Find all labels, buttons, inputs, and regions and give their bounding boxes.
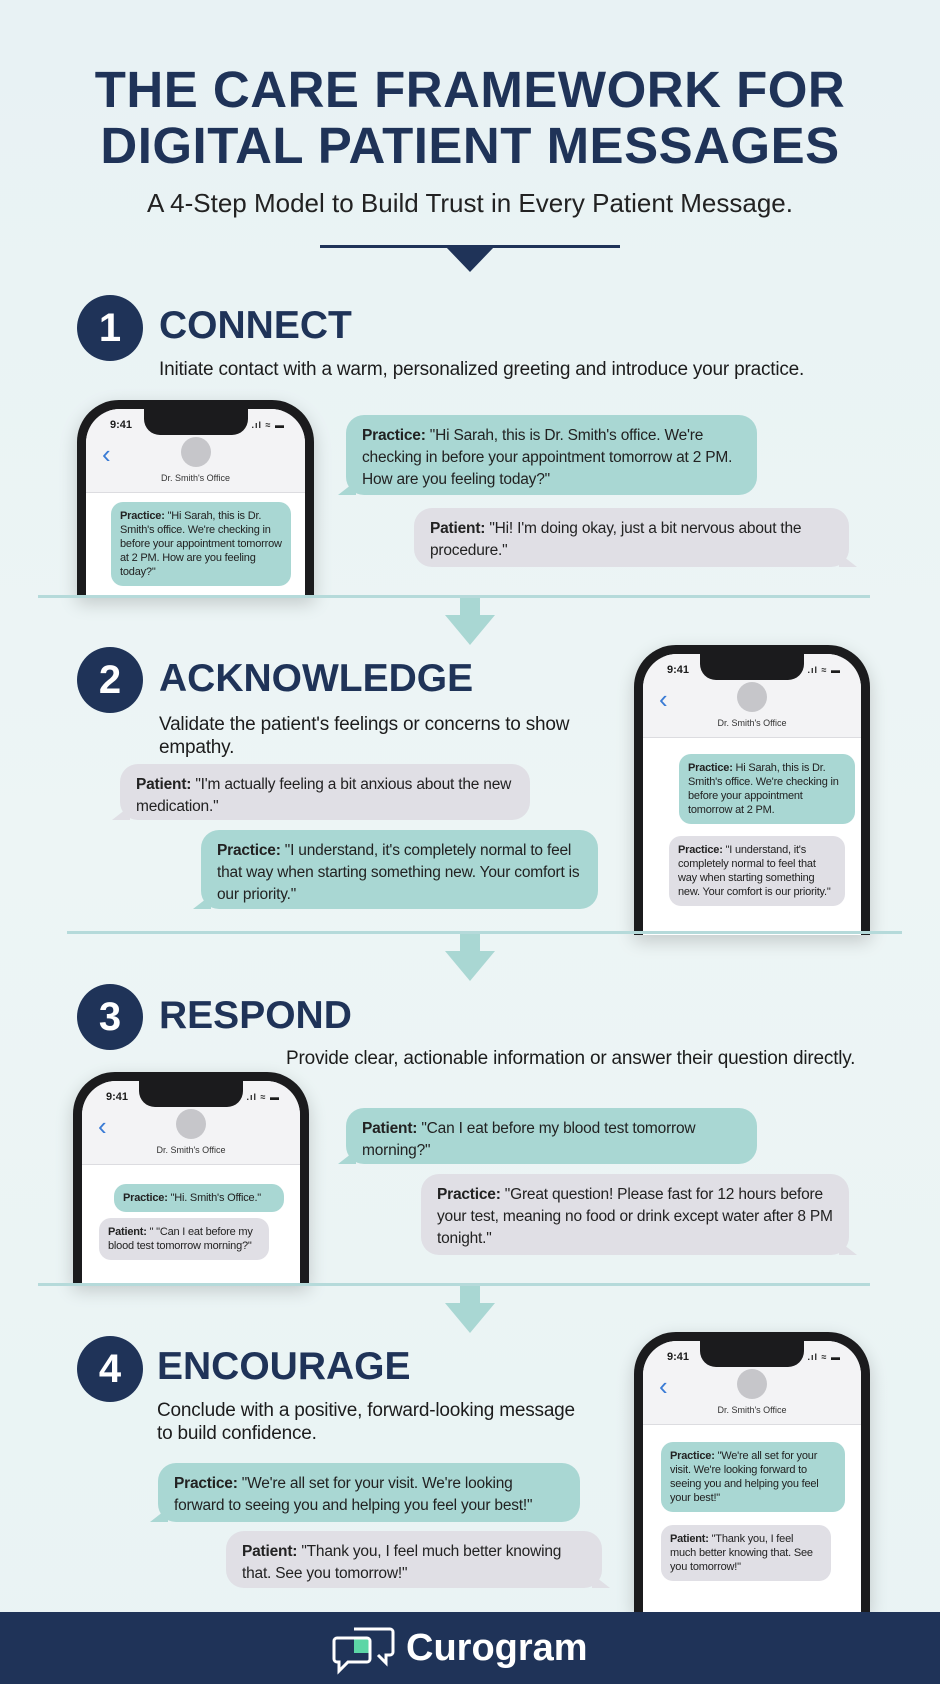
phone 3: Dr. Smith's Office bbox=[156, 1145, 226, 1155]
step 1 number: 1 bbox=[99, 306, 121, 350]
step 2 number bbox=[77, 647, 143, 713]
phone 3: ‹ bbox=[98, 1111, 107, 1141]
phone 4: Dr. Smith's Office bbox=[717, 1405, 787, 1415]
step 4 practice bubble bbox=[158, 1463, 580, 1522]
step 4 description: Conclude with a positive, forward-looking message to build confidence. bbox=[157, 1400, 575, 1444]
arrow 1 bbox=[445, 598, 495, 645]
step 1 practice bubble: Practice: "Hi Sarah, this is Dr. Smith's office. We're checking in before your appointment tomorrow at 2 PM. How are you feeling today?" bbox=[362, 427, 732, 488]
phone 2: Practice: "I understand, it's completely normal to feel that way when starting something new. Your comfort is our priority." bbox=[678, 844, 831, 898]
logo text: Curogram bbox=[406, 1627, 588, 1669]
step 3 number bbox=[77, 984, 143, 1050]
step 1 patient bubble bbox=[414, 508, 849, 567]
phone 4: Practice: "We're all set for your visit. We're looking forward to seeing you and helping you feel your best!" bbox=[670, 1450, 819, 1504]
step 2 heading: ACKNOWLEDGE bbox=[159, 657, 473, 700]
arrow 2 bbox=[445, 934, 495, 981]
subtitle: A 4-Step Model to Build Trust in Every Patient Message. bbox=[147, 188, 793, 218]
step 3 description: Provide clear, actionable information or answer their question directly. bbox=[286, 1048, 855, 1069]
phone 1 bubble: Practice: "Hi Sarah, this is Dr. Smith's office. We're checking in before your appointment tomorrow at 2 PM. How are you feeling today?" bbox=[120, 510, 282, 578]
phone 4: ‹ bbox=[659, 1371, 668, 1401]
step 4 practice bubble: Practice: "We're all set for your visit. We're looking forward to seeing you and helping you feel your best!" bbox=[174, 1475, 532, 1514]
step 1 heading: CONNECT bbox=[159, 304, 352, 347]
step 2 patient bubble bbox=[120, 764, 530, 820]
phone 2: ‹ bbox=[659, 684, 668, 714]
phone 1: 9:41 bbox=[110, 419, 132, 431]
step 2 patient bubble: Patient: "I'm actually feeling a bit anxious about the new medication." bbox=[136, 776, 511, 815]
phone 2: Dr. Smith's Office bbox=[717, 718, 787, 728]
step 1 number bbox=[77, 295, 143, 361]
step 1 description: Initiate contact with a warm, personalized greeting and introduce your practice. bbox=[159, 359, 804, 380]
step 2 practice bubble: Practice: "I understand, it's completely normal to feel that way when starting something new. Your comfort is our priority." bbox=[217, 842, 579, 903]
step 1 patient bubble: Patient: "Hi! I'm doing okay, just a bit nervous about the procedure." bbox=[430, 520, 801, 559]
footer bbox=[0, 1612, 940, 1684]
step 3 practice bubble: Practice: "Great question! Please fast for 12 hours before your test, meaning no food or drink except water after 8 PM tonight." bbox=[437, 1186, 833, 1247]
phone 3: .ıl ≈ ▬ bbox=[247, 1092, 280, 1102]
phone 3: 9:41 bbox=[106, 1091, 128, 1103]
phone 2 bbox=[634, 645, 870, 935]
phone 1: Dr. Smith's Office bbox=[161, 473, 230, 483]
step 1 practice bubble bbox=[346, 415, 757, 495]
phone 1: ‹ bbox=[102, 439, 111, 469]
phone 4: Patient: "Thank you, I feel much better knowing that. See you tomorrow!" bbox=[670, 1533, 813, 1573]
step 3 practice bubble bbox=[421, 1174, 849, 1255]
arrow 3 bbox=[445, 1286, 495, 1333]
step 4 patient bubble: Patient: "Thank you, I feel much better knowing that. See you tomorrow!" bbox=[242, 1543, 561, 1582]
step 4 heading: ENCOURAGE bbox=[157, 1345, 411, 1388]
phone 2: 9:41 bbox=[667, 664, 689, 676]
phone 4: 9:41 bbox=[667, 1351, 689, 1363]
title: DIGITAL PATIENT MESSAGES bbox=[100, 117, 840, 174]
step 2 number: 2 bbox=[99, 658, 121, 702]
step 3 number: 3 bbox=[99, 995, 121, 1039]
title: THE CARE FRAMEWORK FOR bbox=[95, 61, 845, 118]
phone 4: .ıl ≈ ▬ bbox=[808, 1352, 841, 1362]
phone 2: Practice: Hi Sarah, this is Dr. Smith's office. We're checking in before your appointment tomorrow at 2 PM. bbox=[688, 762, 839, 816]
divider with triangle bbox=[320, 245, 620, 272]
phone 3 bbox=[73, 1072, 309, 1284]
step 4 patient bubble bbox=[226, 1531, 602, 1588]
step 2 description: Validate the patient's feelings or concerns to show empathy. bbox=[159, 714, 569, 758]
step 3 heading: RESPOND bbox=[159, 994, 352, 1037]
phone 1: .ıl ≈ ▬ bbox=[252, 420, 285, 430]
phone 3: Patient: " "Can I eat before my blood test tomorrow morning?" bbox=[108, 1226, 253, 1252]
step 3 patient bubble: Patient: "Can I eat before my blood test tomorrow morning?" bbox=[362, 1120, 695, 1159]
logo icon bbox=[332, 1628, 394, 1674]
step 4 number: 4 bbox=[99, 1347, 121, 1391]
phone 3: Practice: "Hi. Smith's Office." bbox=[123, 1192, 261, 1204]
phone 2: .ıl ≈ ▬ bbox=[808, 665, 841, 675]
phone 4 bbox=[634, 1332, 870, 1612]
title bbox=[95, 61, 845, 174]
step 3 patient bubble bbox=[346, 1108, 757, 1164]
step 4 number bbox=[77, 1336, 143, 1402]
phone 1 bbox=[77, 400, 314, 597]
